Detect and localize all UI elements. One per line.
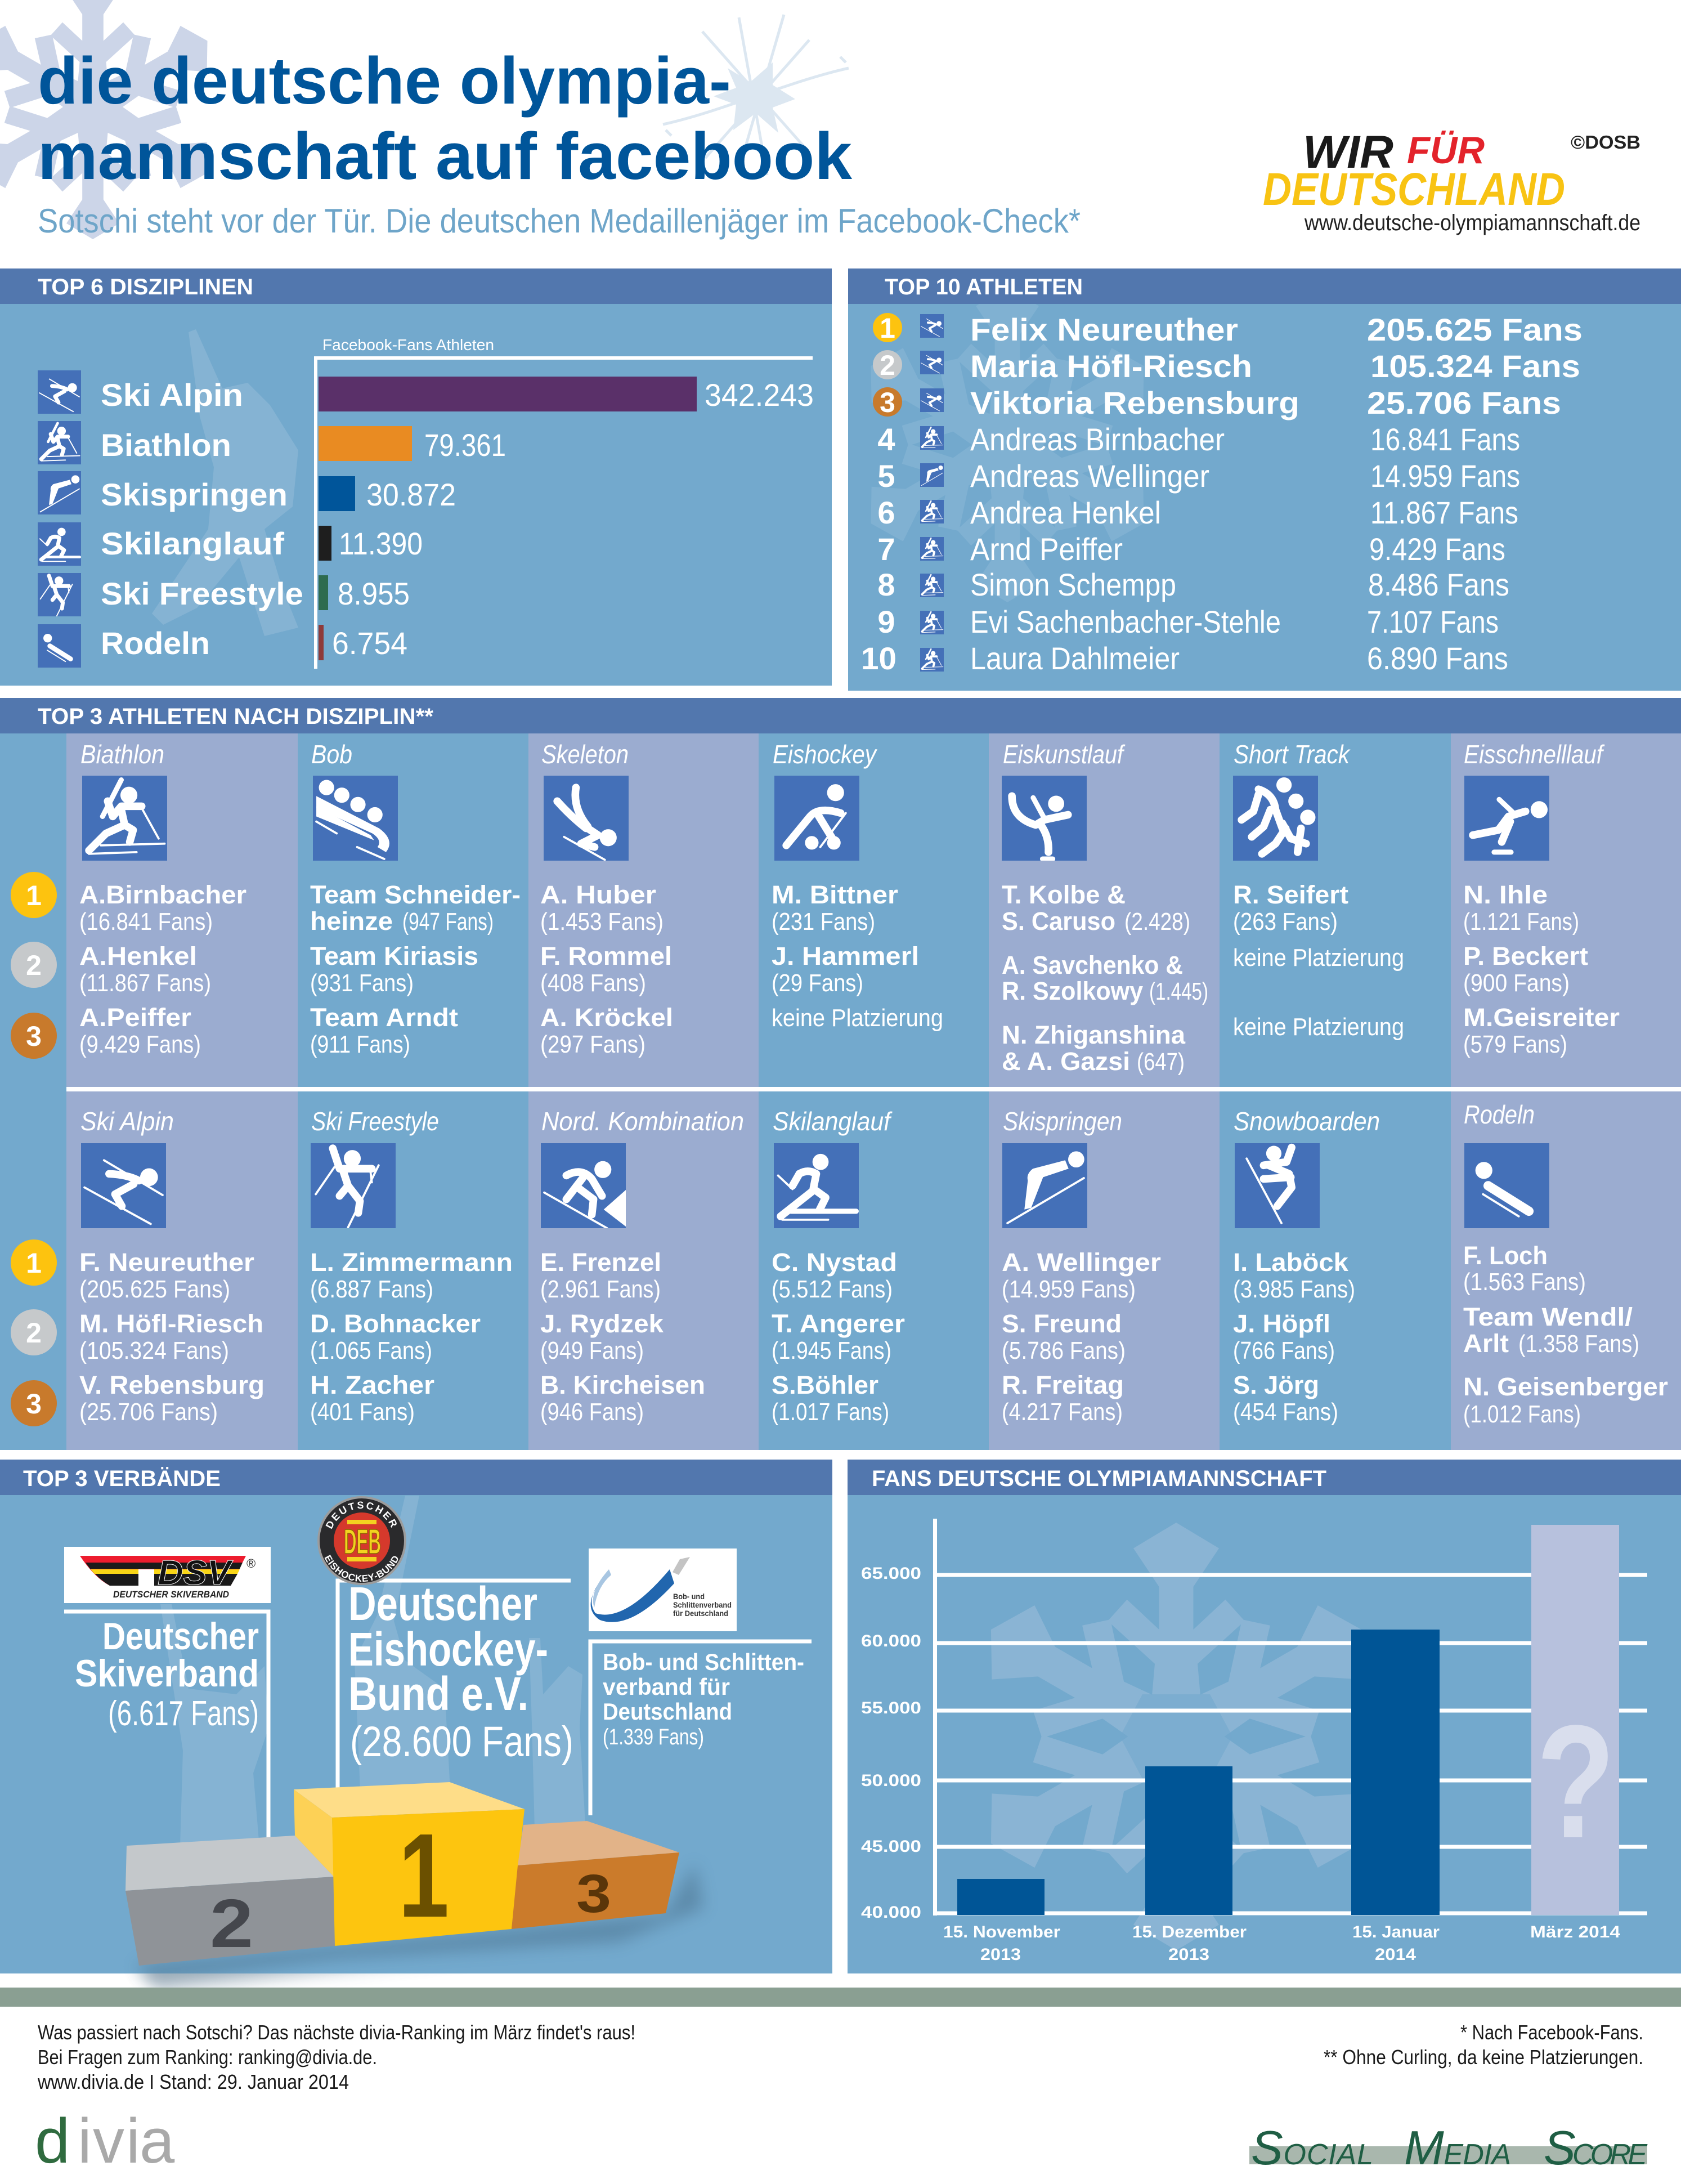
column: Bob: (931 Fans) — [310, 969, 414, 997]
column: Nordische Kombination — [540, 1107, 744, 1426]
text: Bob- und Schlittenverband — [603, 1649, 804, 1749]
subtitle: Sotschi steht vor der Tür. Die deutschen Medaillenjäger im Facebook-Check* — [38, 202, 1081, 240]
column: Eiskunstlauf: Eiskunstlauf — [1003, 740, 1126, 769]
title — [38, 44, 852, 194]
footer text: notes — [1324, 2021, 1643, 2069]
bar: 15. Dezember 2013: 2013 — [1168, 1945, 1209, 1964]
podium drop shadow below panel — [135, 1948, 506, 1993]
text: Bob- und Schlittenverband: Deutschland — [603, 1698, 732, 1725]
heading: TOP 3 VERBÄNDE — [23, 1466, 221, 1491]
rank 9: 7.107 Fans — [1367, 604, 1499, 639]
column: Ski Alpin: F. Neureuther — [79, 1248, 254, 1277]
text: Deutscher Skiverband — [75, 1615, 259, 1733]
rank 8: 8.486 Fans — [1368, 567, 1509, 602]
text: Deutscher Skiverband: (6.617 Fans) — [108, 1694, 259, 1733]
panel: fans deutsche olympiamannschaft — [848, 1460, 1681, 1973]
rank 8: 8 — [877, 567, 895, 602]
row: Skispringen: Skispringen — [101, 477, 288, 512]
footer band — [0, 1988, 1681, 2007]
column: Ski Freestyle: D. Bohnacker — [310, 1309, 481, 1338]
rank 4 — [877, 422, 1520, 457]
row: Ski Alpin: Ski Alpin — [101, 377, 243, 413]
column: Eiskunstlauf: T. Kolbe & — [1002, 880, 1126, 909]
column: Skispringen: Skispringen — [1003, 1107, 1122, 1136]
footer text: left — [37, 2021, 635, 2093]
bar: Maerz 2014 with question mark: ? — [1536, 1691, 1615, 1872]
text: Deutscher Skiverband: Skiverband — [75, 1652, 259, 1695]
row: Skilanglauf: 11.390 — [339, 526, 423, 561]
column: Eiskunstlauf: (647) — [1137, 1048, 1185, 1076]
column: Nordische Kombination: (946 Fans) — [540, 1398, 644, 1426]
column: Rodeln: (1.012 Fans) — [1463, 1400, 1581, 1428]
column: Ski Freestyle: (401 Fans) — [310, 1398, 415, 1426]
logo: DSV: DSV — [158, 1554, 234, 1592]
title: die deutsche olympia- — [38, 44, 731, 118]
heading: FANS DEUTSCHE OLYMPIAMANNSCHAFT — [872, 1466, 1326, 1491]
column: Eiskunstlauf: (1.445) — [1149, 978, 1208, 1005]
rank 6: 6 — [877, 495, 895, 530]
rank 7: 7 — [877, 531, 895, 567]
rank 6: Andrea Henkel — [970, 495, 1161, 530]
column: Ski Freestyle: (6.887 Fans) — [310, 1276, 433, 1303]
row: Biathlon: 79.361 — [424, 427, 506, 463]
row: Ski Freestyle: Ski Freestyle — [101, 576, 303, 611]
column: Ski Freestyle: Ski Freestyle — [311, 1107, 439, 1136]
column: Eiskunstlauf: & A. Gazsi — [1002, 1047, 1130, 1076]
bar: 15. Dezember 2013: 15. Dezember — [1132, 1923, 1247, 1941]
column: Skispringen: S. Freund — [1002, 1309, 1122, 1338]
column: Rodeln: (1.358 Fans) — [1518, 1330, 1639, 1358]
background snowflake: top left — [0, 0, 228, 239]
panel: top 3 verbaende — [0, 1460, 832, 1988]
rank 5: 14.959 Fans — [1370, 458, 1520, 494]
column: Eisschnelllauf: (900 Fans) — [1463, 969, 1570, 997]
column: Skispringen: (5.786 Fans) — [1002, 1337, 1126, 1364]
podium — [125, 1782, 679, 1966]
chart grid and axis — [933, 1575, 1647, 1913]
bar: Maerz 2014 with question mark: März 2014 — [1530, 1923, 1620, 1941]
column: Skeleton: (1.453 Fans) — [540, 908, 664, 936]
medals row 1: 1 — [26, 880, 42, 911]
logo: DEB — [317, 1496, 406, 1585]
column: Biathlon: Biathlon — [80, 740, 164, 769]
rank 2: 105.324 Fans — [1370, 348, 1580, 384]
heading — [848, 268, 1681, 304]
logo: Wir für Deutschland: DEUTSCHLAND — [1263, 164, 1565, 215]
text: Deutscher Eishockey-Bund: Bund e.V. — [348, 1667, 528, 1720]
row: Skilanglauf: Skilanglauf — [101, 526, 284, 561]
column: Eiskunstlauf: R. Szolkowy — [1002, 977, 1143, 1005]
heading: TOP 10 ATHLETEN — [885, 275, 1083, 299]
bar: 15. Dezember 2013 — [1132, 1766, 1247, 1964]
column: Ski Alpin — [79, 1107, 265, 1426]
row: Rodeln — [38, 624, 407, 668]
column: Snowboarden: (3.985 Fans) — [1233, 1276, 1355, 1303]
column: Skeleton: (297 Fans) — [540, 1031, 645, 1058]
column: Skilanglauf: T. Angerer — [772, 1309, 905, 1338]
column: Snowboarden — [1233, 1107, 1380, 1426]
bracket lines — [64, 1581, 812, 1838]
column: Short Track: (263 Fans) — [1233, 908, 1338, 936]
podium shadow — [135, 1863, 703, 1981]
column: Eishockey: keine Platzierung — [772, 1004, 943, 1032]
column: Eiskunstlauf: N. Zhiganshina — [1002, 1021, 1186, 1049]
text: Bob- und Schlittenverband: (1.339 Fans) — [603, 1725, 704, 1749]
watermark crowd silhouettes — [160, 1496, 585, 1846]
title: mannschaft auf facebook — [38, 119, 852, 194]
column: Skilanglauf: (1.017 Fans) — [772, 1398, 889, 1426]
column: Eishockey — [772, 740, 943, 1032]
column: Ski Alpin: V. Rebensburg — [79, 1371, 265, 1399]
column: Eishockey: (29 Fans) — [772, 969, 863, 997]
rank 3: 25.706 Fans — [1367, 385, 1561, 420]
column: Short Track: R. Seifert — [1233, 880, 1348, 909]
column: Eishockey: Eishockey — [773, 740, 878, 769]
column: Skeleton: A. Huber — [540, 880, 656, 909]
column: Eisschnelllauf: N. Ihle — [1463, 880, 1548, 909]
rank 9: 9 — [877, 604, 895, 639]
column: Bob — [310, 740, 521, 1058]
column: Bob: Team Schneider- — [310, 880, 521, 909]
y axis labels: 45.000 — [861, 1837, 921, 1856]
column: Nordische Kombination: Nord. Kombination — [541, 1107, 744, 1136]
text: Deutscher Eishockey-Bund: Eishockey- — [348, 1623, 548, 1676]
column: Biathlon: A.Henkel — [79, 942, 197, 970]
rank 5: 5 — [877, 458, 895, 494]
column: Nordische Kombination: (949 Fans) — [540, 1337, 644, 1364]
column: Eisschnelllauf: (1.121 Fans) — [1463, 908, 1579, 936]
row divider — [66, 1087, 1681, 1091]
y axis labels: 65.000 — [861, 1564, 921, 1583]
rank 7: 9.429 Fans — [1369, 531, 1505, 567]
column: Snowboarden: Snowboarden — [1234, 1107, 1380, 1136]
logo: BSD: Bob- und — [673, 1592, 705, 1601]
rank 2: Maria Höfl-Riesch — [970, 348, 1252, 384]
logo: BSD: Schlittenverband — [673, 1600, 732, 1609]
column: Skispringen: R. Freitag — [1002, 1371, 1124, 1399]
rank 5: Andreas Wellinger — [970, 458, 1209, 494]
column: Bob: Bob — [311, 740, 352, 769]
column: Ski Alpin: (205.625 Fans) — [79, 1276, 230, 1303]
website: www.deutsche-olympiamannschaft.de — [1304, 211, 1640, 235]
text: Deutscher Eishockey-Bund: Deutscher — [348, 1577, 537, 1630]
footer text: notes: * Nach Facebook-Fans. — [1460, 2021, 1643, 2044]
y axis labels: 55.000 — [861, 1699, 921, 1717]
column: Eiskunstlauf: S. Caruso — [1002, 907, 1115, 936]
bar: Maerz 2014 with question mark — [1530, 1525, 1620, 1941]
footer text: left: www.divia.de I Stand: 29. Januar 2014 — [37, 2070, 349, 2093]
text: Deutscher Eishockey-Bund — [348, 1577, 573, 1766]
medals row 2: 1 — [26, 1247, 42, 1279]
column: Snowboarden: (766 Fans) — [1233, 1337, 1335, 1364]
rank 4: 16.841 Fans — [1370, 422, 1520, 457]
column: Nordische Kombination: B. Kircheisen — [540, 1371, 705, 1399]
row: Skispringen — [38, 471, 456, 514]
heading: TOP 3 ATHLETEN NACH DISZIPLIN** — [38, 704, 433, 729]
logo: BSD — [589, 1549, 737, 1631]
column: Bob: Team Kiriasis — [310, 942, 478, 970]
column: Skilanglauf: C. Nystad — [772, 1248, 897, 1277]
column: Bob: Team Arndt — [310, 1003, 458, 1032]
row: Rodeln: 6.754 — [332, 625, 407, 661]
logo: DEB: DEUTSCHER — [325, 1502, 397, 1529]
medals row 2: 2 — [26, 1317, 42, 1349]
bar: 15. November 2013 — [943, 1879, 1060, 1964]
bar: 15. Januar 2014 — [1351, 1630, 1440, 1964]
row: Ski Freestyle — [38, 573, 410, 616]
column: Skeleton: Skeleton — [541, 740, 629, 769]
bar: 15. November 2013: 15. November — [943, 1923, 1060, 1941]
bronze block: 3 — [576, 1864, 611, 1924]
medals row 1: 2 — [26, 950, 42, 981]
rank 10: 6.890 Fans — [1367, 641, 1508, 676]
panel: top 6 disziplinen — [0, 268, 832, 686]
text: Bob- und Schlittenverband: Bob- und Schlitten- — [603, 1649, 804, 1675]
rank 3: Viktoria Rebensburg — [970, 385, 1299, 420]
column: Eisschnelllauf: Eisschnelllauf — [1464, 740, 1605, 769]
bronze block — [512, 1821, 679, 1929]
watermark snowflake — [957, 1523, 1396, 1950]
row: Ski Freestyle: 8.955 — [338, 576, 410, 611]
panel: top 10 athleten — [846, 268, 1681, 691]
rank 2 — [873, 348, 1580, 384]
medals row 1 — [11, 872, 57, 1059]
column: Eishockey: M. Bittner — [772, 880, 898, 909]
logo: Wir für Deutschland — [1263, 127, 1565, 215]
rank 8 — [877, 567, 1509, 602]
column: Snowboarden: J. Höpfl — [1233, 1309, 1330, 1338]
medals row 2: 3 — [26, 1388, 42, 1420]
row: Biathlon — [38, 421, 506, 464]
heading: TOP 6 DISZIPLINEN — [38, 275, 253, 299]
row: Ski Alpin — [38, 370, 814, 414]
column: Ski Alpin: Ski Alpin — [80, 1107, 174, 1136]
logo: BSD: für Deutschland — [673, 1609, 728, 1618]
chart label: Facebook-Fans Athleten — [322, 336, 494, 353]
text: Deutscher Eishockey-Bund: (28.600 Fans) — [350, 1718, 573, 1766]
rank 3: 3 — [880, 387, 895, 418]
column: Eishockey: J. Hammerl — [772, 942, 919, 970]
column: Eisschnelllauf — [1463, 740, 1620, 1058]
gold block: 1 — [398, 1809, 449, 1942]
watermark athlete — [152, 329, 298, 636]
logo: DSV: DEUTSCHER SKIVERBAND — [113, 1589, 229, 1600]
bar: 15. Januar 2014: 2014 — [1375, 1945, 1416, 1964]
column: Rodeln: Team Wendl/ — [1463, 1303, 1633, 1331]
y axis labels — [861, 1564, 921, 1922]
copyright DOSB: ©DOSB — [1571, 132, 1640, 153]
bar: 15. November 2013: 2013 — [980, 1945, 1021, 1964]
rank 9: Evi Sachenbacher-Stehle — [970, 604, 1281, 639]
row: Rodeln: Rodeln — [101, 625, 210, 661]
rank 10: 10 — [861, 641, 896, 676]
logo: Social Media Score: SCORE — [1544, 2122, 1648, 2175]
column: Biathlon: A.Peiffer — [79, 1003, 191, 1032]
column: Biathlon: A.Birnbacher — [79, 880, 246, 909]
column: Biathlon: (9.429 Fans) — [79, 1031, 201, 1058]
column: Skilanglauf: S.Böhler — [772, 1371, 878, 1399]
y axis labels: 50.000 — [861, 1771, 921, 1790]
alternating columns — [66, 733, 1681, 1450]
text: Bob- und Schlittenverband: verband für — [603, 1673, 730, 1700]
y axis labels: 40.000 — [861, 1903, 921, 1922]
column: Skeleton: F. Rommel — [540, 942, 672, 970]
column: Eishockey: (231 Fans) — [772, 908, 875, 936]
row: Skispringen: 30.872 — [366, 477, 456, 512]
column: Eiskunstlauf: A. Savchenko & — [1002, 951, 1183, 979]
column: Eisschnelllauf: (579 Fans) — [1463, 1031, 1567, 1058]
rank 8: Simon Schempp — [970, 567, 1176, 602]
rank 1 — [873, 312, 1583, 347]
column: Biathlon: (11.867 Fans) — [79, 969, 211, 997]
column: Eiskunstlauf: (2.428) — [1124, 908, 1190, 936]
rank 1: 1 — [880, 312, 895, 344]
column: Eiskunstlauf — [1002, 740, 1208, 1076]
column: Ski Freestyle: (1.065 Fans) — [310, 1337, 432, 1364]
column: Rodeln: N. Geisenberger — [1463, 1372, 1668, 1401]
logo: divia: divia — [35, 2106, 175, 2176]
column: Ski Alpin: (25.706 Fans) — [79, 1398, 218, 1426]
logo: Wir für Deutschland: WIR — [1303, 127, 1393, 178]
rank 10: Laura Dahlmeier — [970, 641, 1180, 676]
column: Skilanglauf: (5.512 Fans) — [772, 1276, 893, 1303]
column: Rodeln: F. Loch — [1463, 1241, 1548, 1270]
column: Nordische Kombination: J. Rydzek — [540, 1309, 664, 1338]
logo: Social Media Score: MEDIA — [1404, 2122, 1511, 2175]
logo: Wir für Deutschland: FÜR — [1407, 129, 1485, 172]
logo: Social Media Score — [1249, 2122, 1648, 2175]
rank 4: Andreas Birnbacher — [970, 422, 1225, 457]
column: Skeleton: A. Kröckel — [540, 1003, 673, 1032]
logo: DSV — [64, 1547, 271, 1603]
column: Short Track — [1233, 740, 1404, 1041]
column: Nordische Kombination: (2.961 Fans) — [540, 1276, 661, 1303]
column: Rodeln: Arlt — [1463, 1329, 1509, 1358]
logo: DSV: ® — [246, 1556, 255, 1570]
gold block — [294, 1782, 525, 1946]
rank 6 — [877, 495, 1518, 530]
footer text: left: Was passiert nach Sotschi? Das nächste divia-Ranking im März findet's raus! — [38, 2021, 635, 2044]
footer text: notes: ** Ohne Curling, da keine Platzierungen. — [1324, 2046, 1643, 2069]
heading — [848, 1460, 1681, 1495]
logo: Social Media Score: SOCIAL — [1251, 2122, 1373, 2175]
footer text: left: Bei Fragen zum Ranking: ranking@divia.de. — [38, 2046, 377, 2069]
text: Deutscher Skiverband: Deutscher — [102, 1615, 259, 1658]
column: Skispringen: A. Wellinger — [1002, 1248, 1161, 1277]
rank 10 — [861, 641, 1508, 676]
column: Short Track: Short Track — [1234, 740, 1351, 769]
rank 1: 205.625 Fans — [1367, 312, 1583, 347]
column: Short Track: keine Platzierung — [1233, 1013, 1404, 1041]
background snowflake: thin ice crystal — [663, 15, 849, 175]
column: Ski Freestyle — [310, 1107, 513, 1426]
logo: DEB: EISHOCKEY-BUND — [324, 1555, 398, 1582]
logo: DEB: DEB — [344, 1523, 381, 1561]
column: Eisschnelllauf: M.Geisreiter — [1463, 1003, 1620, 1032]
column: Ski Alpin: M. Höfl-Riesch — [79, 1309, 263, 1338]
row: Biathlon: Biathlon — [101, 427, 231, 463]
rank 4: 4 — [877, 422, 895, 457]
rank 5 — [877, 458, 1520, 494]
column: Rodeln — [1463, 1100, 1668, 1428]
rank 1: Felix Neureuther — [970, 312, 1238, 347]
row: Skilanglauf — [38, 522, 423, 566]
y axis labels: 60.000 — [861, 1632, 921, 1650]
rank 2: 2 — [880, 350, 895, 381]
column: Skilanglauf: (1.945 Fans) — [772, 1337, 891, 1364]
column: Skeleton: (408 Fans) — [540, 969, 646, 997]
column: Ski Alpin: (105.324 Fans) — [79, 1337, 229, 1364]
column: Ski Freestyle: H. Zacher — [310, 1371, 434, 1399]
medals row 1: 3 — [26, 1021, 42, 1052]
column: Rodeln: (1.563 Fans) — [1463, 1268, 1586, 1296]
column: Skilanglauf: Skilanglauf — [773, 1107, 893, 1136]
column: Biathlon: (16.841 Fans) — [79, 908, 213, 936]
column: Eisschnelllauf: P. Beckert — [1463, 942, 1588, 970]
column: Skeleton — [540, 740, 673, 1058]
rank 6: 11.867 Fans — [1370, 495, 1518, 530]
column: Skispringen: (4.217 Fans) — [1002, 1398, 1123, 1426]
column: Skilanglauf — [772, 1107, 905, 1426]
row: Ski Alpin: 342.243 — [705, 377, 814, 413]
column: Bob: (947 Fans) — [402, 908, 494, 936]
column: Bob: (911 Fans) — [310, 1031, 410, 1058]
column: Biathlon — [79, 740, 246, 1058]
column: Nordische Kombination: E. Frenzel — [540, 1248, 661, 1277]
bar: 15. Januar 2014: 15. Januar — [1352, 1923, 1440, 1941]
column: Ski Freestyle: L. Zimmermann — [310, 1248, 513, 1277]
medals row 2 — [11, 1239, 57, 1426]
column: Skispringen — [1002, 1107, 1161, 1426]
rank 7 — [877, 531, 1505, 567]
chart axes — [316, 358, 813, 669]
column: Short Track: keine Platzierung — [1233, 944, 1404, 972]
rank 9 — [877, 604, 1499, 639]
column: Snowboarden: I. Laböck — [1233, 1248, 1349, 1277]
column: Rodeln: Rodeln — [1464, 1100, 1535, 1129]
heading — [0, 1460, 832, 1495]
silver block: 2 — [210, 1885, 253, 1962]
column: Skispringen: (14.959 Fans) — [1002, 1276, 1136, 1303]
heading — [0, 268, 832, 304]
panel: top 3 athleten nach disziplin — [0, 698, 1681, 1450]
silver block — [125, 1836, 335, 1966]
rank 3 — [873, 385, 1561, 420]
heading — [0, 698, 1681, 733]
rank 7: Arnd Peiffer — [970, 531, 1123, 567]
column: Snowboarden: (454 Fans) — [1233, 1398, 1338, 1426]
column: Snowboarden: S. Jörg — [1233, 1371, 1319, 1399]
watermark snowflake — [846, 287, 1169, 602]
column: Bob: heinze — [310, 907, 393, 936]
